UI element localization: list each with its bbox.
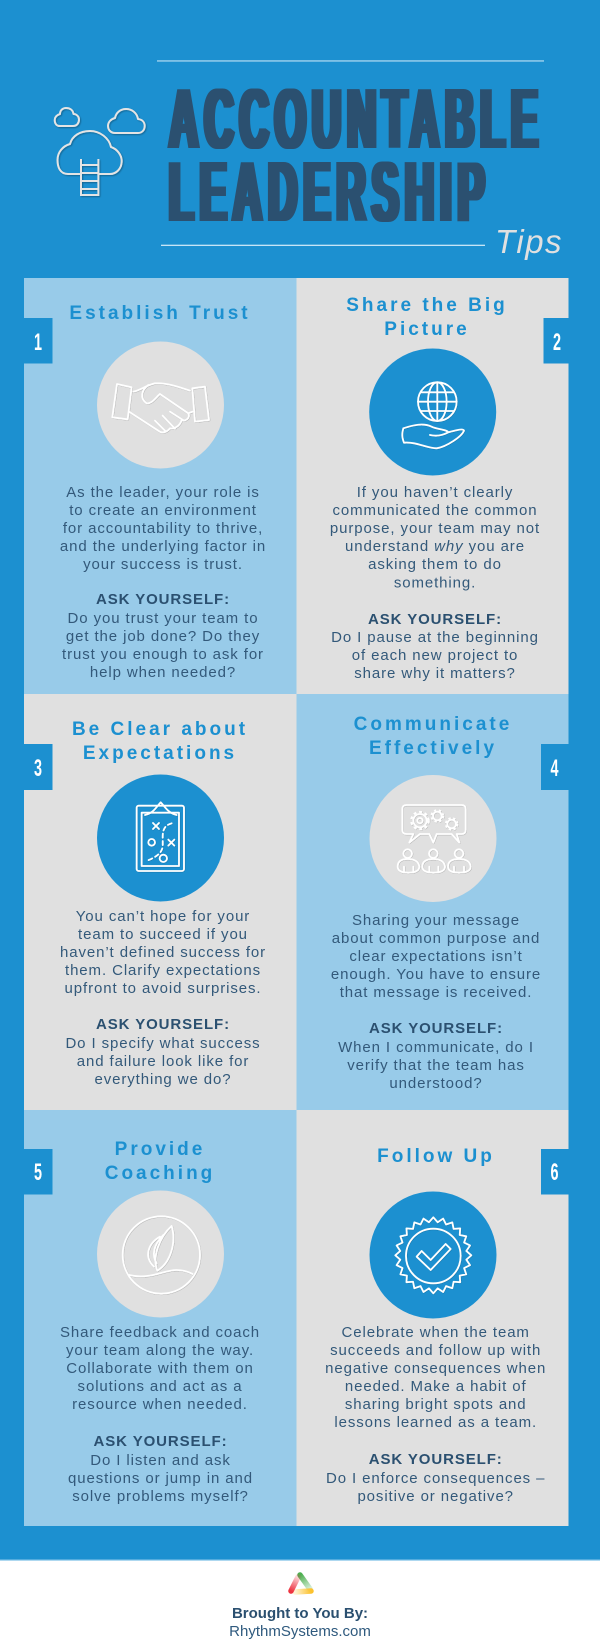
ask yourself 5: questions or jump in and [68,1470,253,1487]
footer credit: Brought to You By: [232,1605,368,1622]
panel 5: Provide Coaching [24,1110,296,1526]
number tab 2 [544,318,568,364]
ask yourself 3: and failure look like for [77,1053,249,1070]
body text 4: about common purpose and [332,930,540,947]
body text 1: to create an environment [69,502,257,519]
icon circle: team and gears [370,775,496,902]
body text 6: succeeds and follow up with [330,1342,541,1359]
ask yourself 3: everything we do? [94,1071,232,1088]
number tab 4 [541,744,568,790]
body text 4: clear expectations isn’t [349,948,523,965]
body text 3: haven’t defined success for [60,944,266,961]
heading 5: Provide [115,1139,205,1160]
panel 3: Be Clear about Expectations [24,694,296,1110]
icon circle: handshake [97,342,224,468]
ask yourself 5: solve problems myself? [72,1488,249,1505]
heading 4: Communicate [354,714,512,735]
panel 5: Provide Coaching: Coaching [105,1163,215,1184]
body text 1: As the leader, your role is [66,484,260,501]
body text 6: needed. Make a habit of [345,1378,527,1395]
subtitle: Tips: Tips [495,223,563,260]
body text 2: something. [394,574,476,592]
icon circle: clipboard [97,774,224,902]
ask yourself 2 [331,611,539,682]
number tab 1: 1 [34,329,42,356]
title: ACCOUNTABLE [169,72,544,167]
body text 5: your team along the way. [66,1342,254,1359]
body text 6: lessons learned as a team. [334,1414,537,1431]
ask yourself 1: Do you trust your team to [68,610,258,627]
body text 1 [60,484,266,573]
body text 2: communicated the common [333,502,537,519]
ask yourself 2: ASK YOURSELF: [368,611,502,628]
panel 1: Establish Trust [24,278,296,694]
body text 6: Celebrate when the team [342,1324,530,1341]
number tab 5: 5 [34,1159,42,1186]
number tab 5 [24,1149,52,1194]
footer credit [229,1605,371,1640]
ask yourself 4: When I communicate, do I [338,1039,534,1056]
heading 3: Be Clear about [72,719,248,740]
footer credit: RhythmSystems.com [229,1623,371,1640]
body text 4: enough. You have to ensure [331,966,541,983]
number tab 6: 6 [550,1159,559,1186]
header rule top [157,60,544,62]
panel 3: Be Clear about Expectations: Expectations [83,743,237,764]
number tab 3: 3 [34,755,42,782]
ask yourself 4: verify that the team has [347,1057,525,1074]
heading 2: Share the Big [346,295,508,316]
body text 5: Share feedback and coach [60,1324,260,1341]
body text 1: and the underlying factor in [60,538,266,555]
ask yourself 5 [68,1433,253,1505]
body text 5: resource when needed. [72,1396,248,1413]
body text 2 [330,484,540,592]
ask yourself 6: positive or negative? [357,1488,514,1505]
ask yourself 1: trust you enough to ask for [62,646,264,663]
body text 3: team to succeed if you [78,926,248,943]
body text 3: You can’t hope for your [76,908,250,925]
body text 5: Collaborate with them on [66,1360,254,1377]
body text 3: upfront to avoid surprises. [65,980,261,997]
ask yourself 5: Do I listen and ask [90,1452,231,1469]
ask yourself 3: ASK YOURSELF: [96,1016,230,1033]
body text 5 [60,1324,260,1413]
body text 2: purpose, your team may not [330,520,540,537]
ask yourself 4 [338,1020,534,1092]
body text 6: negative consequences when [325,1360,546,1377]
ask yourself 2: Do I pause at the beginning [331,629,539,646]
panel 2: Share the Big Picture [296,278,568,694]
panel 4: Communicate Effectively: Effectively [369,738,497,759]
logo: tri-colour triangle [291,1575,311,1592]
footer band [0,1560,600,1650]
body text 2: asking them to do [368,556,502,573]
ask yourself 4: understood? [389,1075,483,1092]
panel 6: Follow Up [296,1110,568,1526]
ask yourself 6: ASK YOURSELF: [369,1451,503,1468]
icon circle: globe in hand [369,348,496,476]
number tab 3 [24,744,52,790]
body text 5: solutions and act as a [78,1378,242,1395]
body text 2: If you haven’t clearly [357,484,513,501]
ask yourself 5: ASK YOURSELF: [94,1433,227,1450]
body text 6: sharing bright spots and [345,1396,527,1413]
ask yourself 1: help when needed? [90,664,236,681]
body text 3: them. Clarify expectations [65,962,261,979]
ask yourself 6: Do I enforce consequences – [326,1470,545,1487]
icon circle: badge with check [370,1192,496,1318]
ask yourself 6 [326,1451,545,1505]
number tab 6 [541,1149,568,1194]
heading 1: Establish Trust [69,303,251,324]
number tab 2: 2 [553,329,561,356]
panel 2: Share the Big Picture: Picture [384,319,470,340]
body text 4: Sharing your message [352,912,520,929]
ask yourself 1 [62,591,264,681]
ask yourself 2: share why it matters? [354,665,516,682]
body text 1: your success is trust. [83,556,243,573]
icon circle: sprout [97,1190,224,1318]
panel 4: Communicate Effectively [296,694,568,1110]
ask yourself 1: ASK YOURSELF: [96,591,230,608]
icon: clouds and ladder [55,108,145,196]
body text 6 [325,1324,546,1431]
number tab 4: 4 [550,755,559,782]
body text 4: that message is received. [340,984,532,1001]
heading 6: Follow Up [377,1146,495,1167]
title: LEADERSHIP [169,145,491,240]
body text 1: for accountability to thrive, [63,520,263,537]
title [169,72,544,240]
body text 2: understand why you are [345,538,525,555]
number tab 1 [24,318,52,364]
ask yourself 2: of each new project to [352,647,518,664]
ask yourself 3: Do I specify what success [65,1035,261,1052]
ask yourself 4: ASK YOURSELF: [369,1020,503,1037]
ask yourself 1: get the job done? Do they [66,628,260,645]
ask yourself 3 [65,1016,261,1088]
body text 4 [331,912,541,1001]
body text 3 [60,908,266,997]
header rule bottom [161,245,485,246]
